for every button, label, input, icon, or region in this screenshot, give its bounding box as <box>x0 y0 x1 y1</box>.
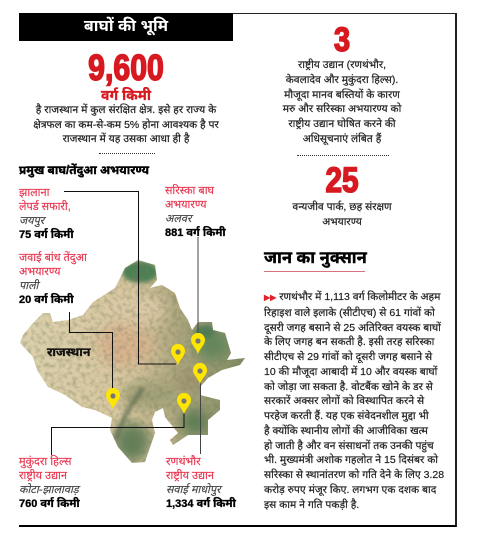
leader line: Sariska <box>197 237 199 342</box>
article body: के लिए जगह बन सकती है. इसी तरह सरिस्का <box>264 336 434 348</box>
label: Ranthambore: सवाई माधोपुर <box>166 484 221 496</box>
pin: Jhalana <box>171 344 185 365</box>
section heading: loss of life: जान का नुक्सान <box>264 249 367 267</box>
label: Sariska: अलवर <box>165 213 191 225</box>
protected area description: क्षेत्रफल का कम-से-कम 5% होना आवश्यक है पर <box>33 119 219 131</box>
national parks description <box>282 58 402 145</box>
label: Jawai: 20 वर्ग किमी <box>19 294 74 306</box>
label: Sariska <box>164 184 226 239</box>
protected area description <box>33 103 220 145</box>
dotted separator <box>99 153 155 154</box>
dotted separator <box>297 155 389 156</box>
article body: करोड़ रुपए मंजूर किए. लगभग एक दशक बाद <box>264 484 436 496</box>
title banner <box>19 13 233 41</box>
article body: भी. मुख्यमंत्री अशोक गहलोत ने 15 दिसंबर को <box>264 454 438 466</box>
pin: Ranthambore <box>193 363 207 384</box>
national parks description: मौजूदा मानव बस्तियों के कारण <box>284 88 400 100</box>
pin: Jawai <box>106 388 120 409</box>
national parks description: मरु और सरिस्का अभयारण्य को <box>283 103 401 115</box>
national parks description: अधिसूचनाएं लंबित हैं <box>303 133 381 145</box>
statistic: 25: 25 <box>325 161 359 200</box>
label: Jawai: पाली <box>19 280 38 292</box>
national parks description: राष्ट्रीय उद्यान (रणथंभौर, <box>298 59 386 71</box>
label: Ranthambore: राष्ट्रीय उद्यान <box>166 470 214 482</box>
article body: सरकारें अक्सर लोगों को विस्थापित करने से <box>264 395 424 407</box>
wildlife parks description <box>292 200 392 228</box>
label: Sariska: 881 वर्ग किमी <box>165 227 226 239</box>
label: Jhalana: जयपुर <box>19 215 44 227</box>
leader line: Jawai <box>70 312 112 397</box>
label: Jhalana: झालाना <box>19 187 49 199</box>
frame right rule <box>455 13 456 527</box>
national parks description: राष्ट्रीय उद्यान घोषित करने की <box>288 118 396 130</box>
title banner: बाघों की भूमि <box>84 18 168 35</box>
national parks description: केवलादेव और मुकुंदरा हिल्स). <box>286 74 398 86</box>
label: Jhalana: लेपर्ड सफारी, <box>19 201 71 213</box>
leader line: Mukundra <box>52 404 184 455</box>
label: Mukundra: कोटा-झालावाड़ <box>19 484 79 496</box>
article body: को जोड़ा जा सकता है. वोटबैंक खोने के डर से <box>264 380 433 392</box>
article body: रिहाइश वाले इलाके (सीटीएच) से 61 गांवों को <box>264 307 435 319</box>
label: Mukundra: राष्ट्रीय उद्यान <box>19 470 67 482</box>
protected area description: है राजस्थान में कुल संरक्षित क्षेत्र. इसे हर राज्य के <box>36 104 216 116</box>
pin: Mukundra <box>177 393 191 414</box>
label: Sariska: सरिस्का बाघ <box>165 185 214 197</box>
label: Mukundra: मुकुंदरा हिल्स <box>19 456 72 468</box>
article body: दूसरी जगह बसाने से 25 अतिरिक्त वयस्क बाघों <box>264 322 441 334</box>
frame top rule <box>233 13 456 14</box>
map label: Rajasthan: राजस्थान <box>47 345 91 359</box>
statistic unit: वर्ग किमी <box>101 87 151 103</box>
article body: सरिस्का से स्थानांतरण को गति देने के लिए 3.28 <box>264 469 444 481</box>
label: Jawai: जवाई बांध तेंदुआ <box>19 252 87 264</box>
article body: सीटीएच से 29 गांवों को दूसरी जगह बसाने से <box>264 351 432 363</box>
article body: हो जाती है और वन संसाधनों तक उनकी पहुंच <box>264 440 434 452</box>
statistic: 9,600: 9,600 <box>88 47 164 88</box>
article body: ▶▶ रणथंभौर में 1,113 वर्ग किलोमीटर के अहम <box>264 291 440 303</box>
label: Ranthambore: 1,334 वर्ग किमी <box>166 498 236 510</box>
map of Rajasthan with pins and leader lines <box>20 191 245 463</box>
article body: परहेज करती हैं. यह एक संवेदनशील मुद्दा भी <box>264 410 429 422</box>
article body: इस काम ने गति पकड़ी है. <box>264 498 359 510</box>
wildlife parks description: अभयारण्य <box>322 216 362 228</box>
label: Jawai: अभयारण्य <box>19 266 60 278</box>
article body: है क्योंकि स्थानीय लोगों की आजीविका खत्म <box>264 425 428 437</box>
label: Jhalana <box>18 187 74 241</box>
label: Mukundra: 760 वर्ग किमी <box>19 498 80 510</box>
label: Ranthambore <box>166 454 236 510</box>
statistic: 3: 3 <box>334 21 350 59</box>
leader line: Jhalana <box>64 192 176 364</box>
wildlife parks description: वन्यजीव पार्क, छह संरक्षण <box>292 201 392 213</box>
label: Sariska: अभयारण्य <box>165 199 206 211</box>
leader line: Ranthambore <box>200 372 202 454</box>
label: Jhalana: 75 वर्ग किमी <box>19 229 74 241</box>
article body <box>264 290 444 510</box>
label: Ranthambore: रणथंभौर <box>166 456 201 468</box>
article body: 10 की मौजूदा आबादी में 10 और वयस्क बाघों <box>264 366 437 378</box>
heading underline <box>264 271 365 272</box>
protected area description: राजस्थान में यह उसका आधा ही है <box>63 133 189 145</box>
label: Mukundra <box>18 454 80 510</box>
label: Jawai <box>18 251 88 306</box>
sanctuaries heading: प्रमुख बाघ/तेंदुआ अभयारण्य <box>19 163 149 177</box>
bottom rule <box>19 524 456 526</box>
pin: Sariska <box>191 333 205 354</box>
map <box>15 255 250 467</box>
